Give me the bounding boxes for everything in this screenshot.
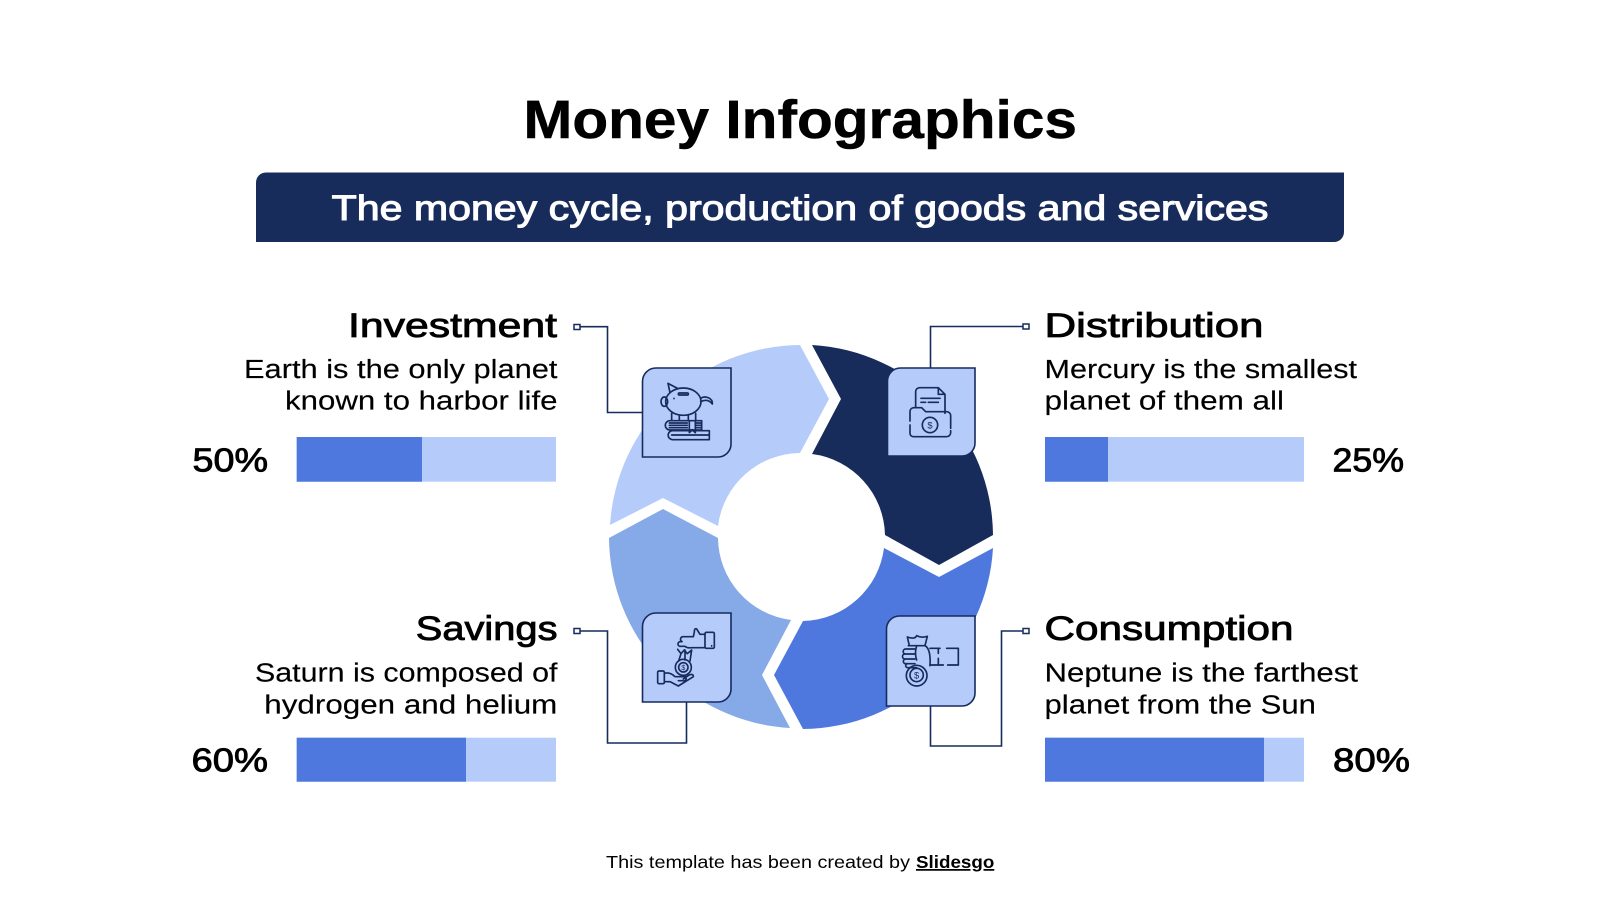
icon: piggy bank on books	[642, 368, 731, 457]
footer credit: Slidesgo	[916, 852, 994, 872]
value: 80%: 80%	[1333, 743, 1410, 780]
description: savings: hydrogen and helium	[264, 692, 557, 720]
description: distribution: planet of them all	[1044, 388, 1284, 416]
panel: distribution	[1044, 307, 1404, 482]
connector: consumption	[930, 628, 1029, 746]
description: investment: Earth is the only planet	[244, 356, 558, 384]
value: 50%: 50%	[192, 443, 268, 480]
panel: savings	[192, 610, 559, 782]
subtitle banner	[256, 172, 1344, 242]
title: Money Infographics	[524, 90, 1077, 150]
value: 60%: 60%	[192, 743, 268, 780]
description: distribution: Mercury is the smallest	[1044, 356, 1357, 384]
footer credit: This template has been created by	[606, 852, 910, 872]
progress bar: 50%	[297, 437, 556, 482]
icon: hand holding money bag: $	[914, 670, 920, 680]
cycle ring	[609, 345, 993, 729]
segment: savings	[609, 509, 791, 728]
progress bar: 80%	[1045, 738, 1304, 782]
heading: consumption: Consumption	[1044, 610, 1294, 648]
description: distribution	[1044, 356, 1357, 416]
progress bar: 25%	[1045, 437, 1304, 482]
icon: hand holding money bag	[886, 616, 975, 706]
segment: distribution	[812, 345, 993, 565]
description: investment: known to harbor life	[285, 388, 558, 416]
connector: distribution	[930, 324, 1029, 368]
heading: distribution: Distribution	[1044, 307, 1264, 345]
description: savings: Saturn is composed of	[255, 660, 559, 688]
footer credit	[606, 852, 994, 872]
icon: folder with document: $	[927, 420, 933, 430]
description: savings	[255, 660, 559, 720]
segment: investment	[610, 345, 829, 526]
description: investment	[244, 356, 558, 416]
panel: investment	[192, 307, 558, 482]
description: consumption	[1044, 660, 1358, 720]
connector: investment	[574, 324, 642, 412]
segment: consumption	[774, 548, 993, 729]
heading: savings: Savings	[416, 610, 558, 648]
heading: investment: Investment	[348, 307, 558, 345]
icon: hand passing money bag: $	[681, 663, 685, 672]
value: 25%: 25%	[1332, 443, 1404, 480]
icon: hand passing money bag	[642, 613, 731, 702]
progress bar: 60%	[297, 738, 556, 782]
description: consumption: Neptune is the farthest	[1044, 660, 1358, 688]
panel: consumption	[1044, 610, 1410, 782]
icon: folder with document	[888, 368, 975, 456]
subtitle banner: The money cycle, production of goods and services	[332, 188, 1268, 228]
connector: savings	[574, 628, 686, 743]
description: consumption: planet from the Sun	[1044, 692, 1316, 720]
